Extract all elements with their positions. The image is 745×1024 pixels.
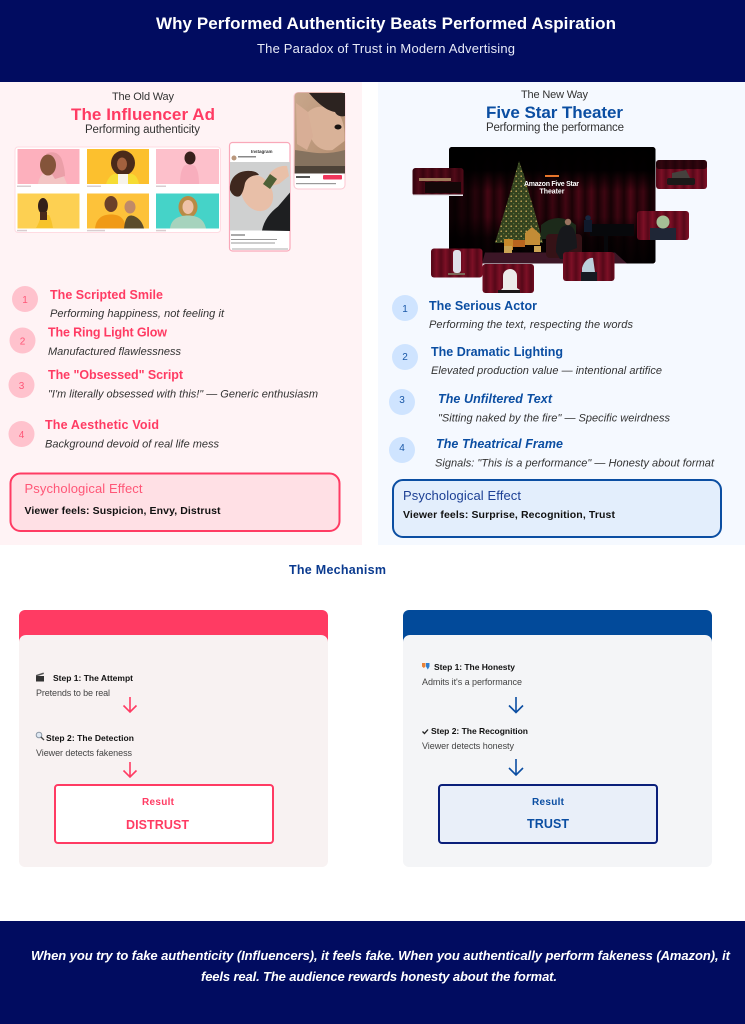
item 2: Manufactured flawlessness: [48, 346, 182, 358]
item 4: The Theatrical Frame: [436, 437, 563, 451]
step 2: Viewer detects fakeness: [36, 748, 132, 758]
item 1: 1: [22, 295, 28, 306]
item 1: [12, 286, 225, 320]
footer takeaway: [0, 921, 745, 1024]
panel: the old way: [0, 82, 362, 545]
step 1: Step 1: The Attempt: [53, 673, 133, 683]
step 1: Step 1: The Honesty: [434, 662, 515, 672]
step 2: Viewer detects honesty: [422, 741, 514, 751]
instagram phone mockup: Instagram: [251, 149, 273, 154]
footer takeaway: When you try to fake authenticity (Influencers), it feels fake. When you authentically perform fakeness (Amazon), it: [31, 948, 731, 963]
callout: psychological effect (new): [393, 480, 721, 537]
result box: Result: [142, 797, 175, 808]
item 2: The Dramatic Lighting: [431, 345, 563, 359]
panel: distrust flow: [19, 610, 328, 867]
item 2: [10, 326, 182, 358]
item 4: The Aesthetic Void: [45, 418, 159, 432]
list: old way items: [8, 286, 318, 450]
callout: psychological effect (old): Psychological Effect: [24, 481, 143, 496]
icon: check mark: [422, 730, 428, 734]
item 2: 2: [402, 352, 408, 363]
item 1: [392, 295, 634, 331]
step 2: Step 2: The Detection: [46, 733, 134, 743]
item 3: "Sitting naked by the fire" — Specific weirdness: [438, 412, 670, 424]
step 2: Step 2: The Recognition: [431, 726, 528, 736]
item 1: 1: [402, 304, 408, 315]
item 1: Performing happiness, not feeling it: [50, 308, 225, 320]
item 3: [8, 368, 318, 400]
thumbnail images: [412, 160, 707, 293]
item 1: Performing the text, respecting the words: [429, 319, 634, 331]
stage image title: Amazon Five Star: [524, 181, 579, 188]
icon: clapperboard: [36, 672, 44, 682]
old way subheading: Performing authenticity: [85, 124, 200, 136]
list: new way items: [389, 295, 715, 470]
icon: performing arts: [422, 663, 430, 670]
step 1: [36, 673, 133, 698]
item 2: [392, 344, 662, 377]
footer takeaway: feels real. The audience rewards honesty about the format.: [201, 969, 557, 984]
new way kicker: The New Way: [521, 89, 588, 101]
item 4: 4: [399, 443, 405, 454]
tiktok phone mockup: [294, 92, 345, 189]
theater stage image: [449, 147, 656, 264]
item 2: 2: [20, 336, 26, 348]
header banner: [0, 0, 745, 82]
item 1: The Serious Actor: [429, 299, 537, 313]
callout: psychological effect (new): Viewer feels: Surprise, Recognition, Trust: [403, 509, 616, 521]
new way subheading: Performing the performance: [486, 122, 624, 134]
item 4: Signals: "This is a performance" — Honesty about format: [435, 458, 715, 470]
panel: the new way: [378, 82, 745, 545]
arrow: [509, 697, 523, 712]
result box: TRUST: [527, 817, 569, 831]
step 1: [422, 662, 522, 687]
old way heading: The Influencer Ad: [71, 105, 215, 124]
stage image title: [524, 175, 579, 196]
old way kicker: The Old Way: [112, 91, 174, 103]
panel: trust flow: [403, 610, 712, 867]
result box: [55, 785, 273, 843]
new way heading: Five Star Theater: [486, 103, 623, 122]
subtitle: The Paradox of Trust in Modern Advertising: [257, 41, 515, 56]
item 3: The Unfiltered Text: [438, 392, 553, 406]
step 2: [422, 726, 528, 751]
result box: Result: [532, 797, 565, 808]
icon: magnifier: [36, 732, 44, 740]
item 1: The Scripted Smile: [50, 288, 163, 302]
step 1: Pretends to be real: [36, 688, 110, 698]
influencer photo grid: [15, 147, 220, 232]
stage image title: Theater: [540, 188, 565, 196]
step 2: [36, 733, 134, 758]
title: Why Performed Authenticity Beats Performed Aspiration: [156, 14, 616, 33]
step 1: Admits it's a performance: [422, 677, 522, 687]
arrow: [509, 759, 523, 775]
item 2: Elevated production value — intentional artifice: [431, 365, 662, 377]
item 2: The Ring Light Glow: [48, 326, 167, 340]
result box: [439, 785, 657, 843]
arrow: [124, 697, 136, 712]
callout: psychological effect (old): [10, 474, 340, 531]
item 4: Background devoid of real life mess: [45, 438, 220, 450]
item 3: "I'm literally obsessed with this!" — Generic enthusiasm: [48, 388, 318, 400]
arrow: [124, 762, 136, 777]
item 4: [389, 437, 715, 470]
heading: the mechanism: The Mechanism: [289, 563, 386, 577]
instagram phone mockup: [230, 142, 290, 251]
callout: psychological effect (old): Viewer feels: Suspicion, Envy, Distrust: [24, 505, 221, 517]
result box: DISTRUST: [126, 818, 189, 832]
item 3: 3: [19, 381, 25, 392]
item 4: 4: [19, 430, 25, 441]
item 4: [8, 418, 220, 450]
item 3: [389, 389, 670, 424]
callout: psychological effect (new): Psychological Effect: [403, 488, 521, 503]
item 3: The "Obsessed" Script: [48, 368, 184, 382]
item 3: 3: [399, 395, 405, 406]
